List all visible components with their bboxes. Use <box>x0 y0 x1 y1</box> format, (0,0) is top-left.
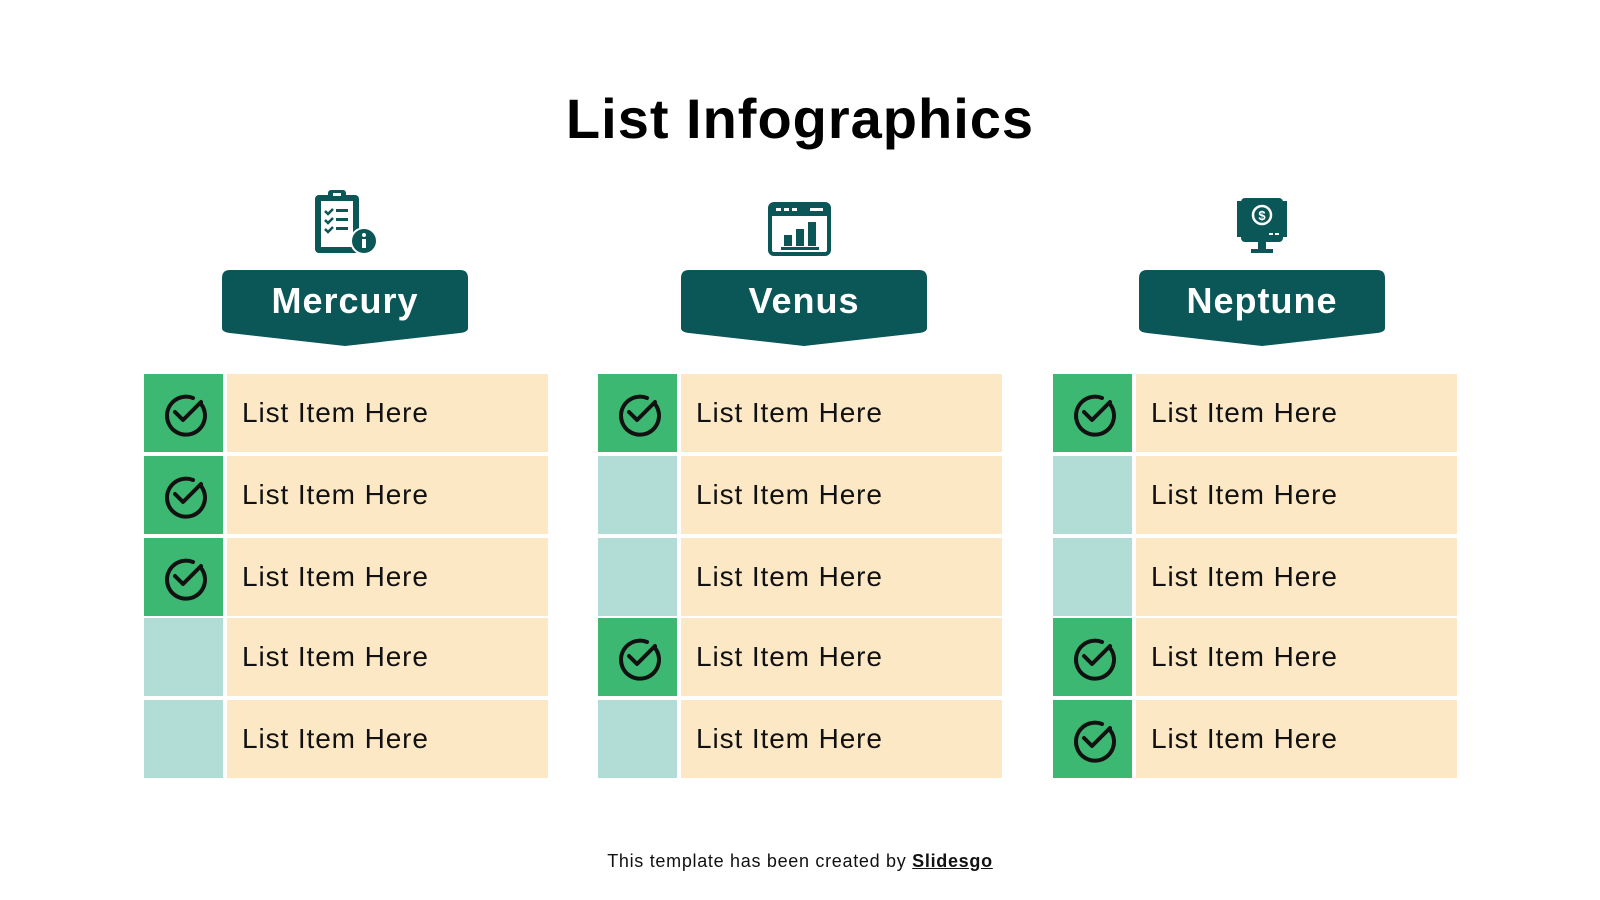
icon: monitor dollar: $ <box>1258 208 1266 223</box>
panel: Venus list: List Item Here <box>696 723 883 754</box>
title: List Infographics <box>566 87 1034 150</box>
panel: Mercury list: List Item Here <box>242 397 429 428</box>
panel: Neptune list: List Item Here <box>1151 723 1338 754</box>
panel: Mercury list: List Item Here <box>242 723 429 754</box>
banner: Mercury <box>222 270 468 346</box>
banner: Neptune <box>1139 270 1385 346</box>
banner: Neptune: Neptune <box>1186 280 1338 321</box>
panel: Neptune list <box>1053 374 1457 778</box>
panel: Venus list: List Item Here <box>696 641 883 672</box>
panel: Venus list <box>598 374 1002 778</box>
banner: Venus <box>681 270 927 346</box>
icon: monitor dollar <box>1237 198 1287 253</box>
icon: chart window <box>768 202 831 256</box>
panel: Mercury list <box>144 374 548 778</box>
footer: This template has been created by Slidesgo <box>607 851 993 871</box>
panel: Neptune list: List Item Here <box>1151 397 1338 428</box>
panel: Venus list: List Item Here <box>696 479 883 510</box>
banner: Mercury: Mercury <box>271 280 419 321</box>
panel: Neptune list: List Item Here <box>1151 479 1338 510</box>
panel: Mercury list: List Item Here <box>242 479 429 510</box>
panel: Neptune list: List Item Here <box>1151 561 1338 592</box>
panel: Mercury list: List Item Here <box>242 641 429 672</box>
panel: Mercury list: List Item Here <box>242 561 429 592</box>
banner: Venus: Venus <box>748 280 860 321</box>
panel: Venus list: List Item Here <box>696 397 883 428</box>
panel: Venus list: List Item Here <box>696 561 883 592</box>
panel: Neptune list: List Item Here <box>1151 641 1338 672</box>
icon: clipboard <box>315 190 376 253</box>
